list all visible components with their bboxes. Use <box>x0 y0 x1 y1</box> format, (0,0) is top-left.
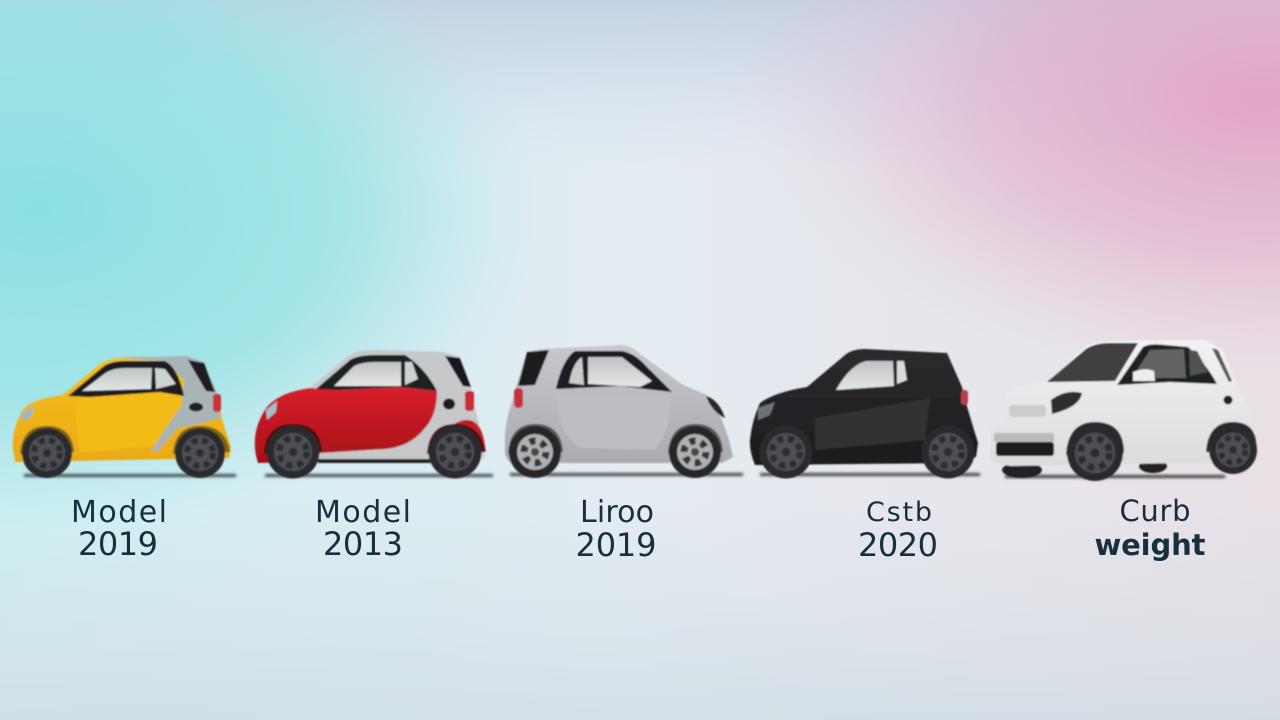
label: Liroo 2019 <box>576 495 656 564</box>
window frame <box>556 351 672 392</box>
body <box>750 349 978 465</box>
silver rear section <box>112 356 220 451</box>
label: Curb weight: weight <box>1094 528 1206 562</box>
wheels <box>760 426 812 478</box>
far side wheels <box>1002 462 1042 478</box>
side window <box>1132 349 1186 378</box>
headlight <box>266 401 277 420</box>
rear red arch <box>450 420 486 452</box>
body <box>255 350 485 463</box>
label: Cstb 2020: Cstb <box>866 497 932 528</box>
door panel <box>556 394 670 450</box>
ground shadow <box>24 474 236 477</box>
headlight <box>706 396 725 418</box>
window frame <box>316 355 437 391</box>
wheels <box>509 426 561 478</box>
door panel <box>815 398 930 450</box>
label: Cstb 2020 <box>858 497 938 564</box>
taillight <box>961 390 968 405</box>
car: red <box>255 350 493 478</box>
label: Curb weight: Curb <box>1120 494 1190 528</box>
wheels <box>266 426 320 478</box>
wheels <box>1067 425 1123 481</box>
label: Cstb 2020: 2020 <box>858 526 938 564</box>
front wheel arch <box>668 424 723 454</box>
label: Model 2013 <box>315 495 411 563</box>
car: yellow <box>13 356 236 478</box>
taillight <box>213 394 221 412</box>
rear window <box>518 350 549 386</box>
front wheel arch <box>20 426 74 454</box>
sill <box>318 459 433 463</box>
taillight <box>465 391 474 411</box>
rear quarter stripe <box>1212 348 1232 382</box>
ground shadow <box>760 473 980 476</box>
mirror <box>1133 369 1155 381</box>
label: Model 2013: Model <box>315 495 411 530</box>
car: black <box>750 349 980 478</box>
rear wheel arch <box>508 424 563 454</box>
taillight <box>514 388 523 408</box>
rear wheel arch <box>1206 422 1256 452</box>
headlight <box>758 402 775 420</box>
label: Liroo 2019: 2019 <box>576 526 656 564</box>
headlight <box>21 405 34 421</box>
front wheel arch <box>264 424 322 454</box>
front panel shade <box>1009 405 1046 417</box>
fuel cap <box>1224 396 1232 404</box>
label: Liroo 2019: Liroo <box>580 495 654 530</box>
headlight <box>1051 392 1082 414</box>
rear wheel arch <box>173 426 230 454</box>
fuel cap <box>189 402 203 412</box>
body <box>13 357 231 462</box>
body <box>505 345 733 463</box>
car: silver <box>505 345 743 478</box>
red front and door <box>255 387 437 463</box>
fuel cap <box>443 398 455 410</box>
window <box>82 368 152 391</box>
label: Model 2013: 2013 <box>323 525 403 563</box>
ground shadow <box>1005 475 1225 478</box>
door panel <box>76 393 182 453</box>
front wheel arch <box>1066 422 1124 455</box>
windshield <box>1047 343 1138 382</box>
rear quarter window <box>445 356 471 387</box>
label: Model 2019 <box>71 495 167 563</box>
wheels <box>22 428 72 478</box>
ground shadow <box>265 474 493 477</box>
window <box>569 357 584 385</box>
label: Curb weight <box>1094 494 1206 562</box>
label: Model 2019: 2019 <box>78 525 158 563</box>
ground shadow <box>510 473 743 476</box>
label: Model 2019: Model <box>71 495 167 530</box>
grille <box>994 433 1054 442</box>
window <box>836 361 894 390</box>
window frame <box>68 361 184 397</box>
rear wheel arch <box>427 424 485 454</box>
rear quarter window <box>188 360 215 392</box>
window <box>334 362 401 386</box>
body <box>990 340 1255 466</box>
side window frame <box>1117 344 1217 385</box>
car: white <box>990 340 1257 481</box>
